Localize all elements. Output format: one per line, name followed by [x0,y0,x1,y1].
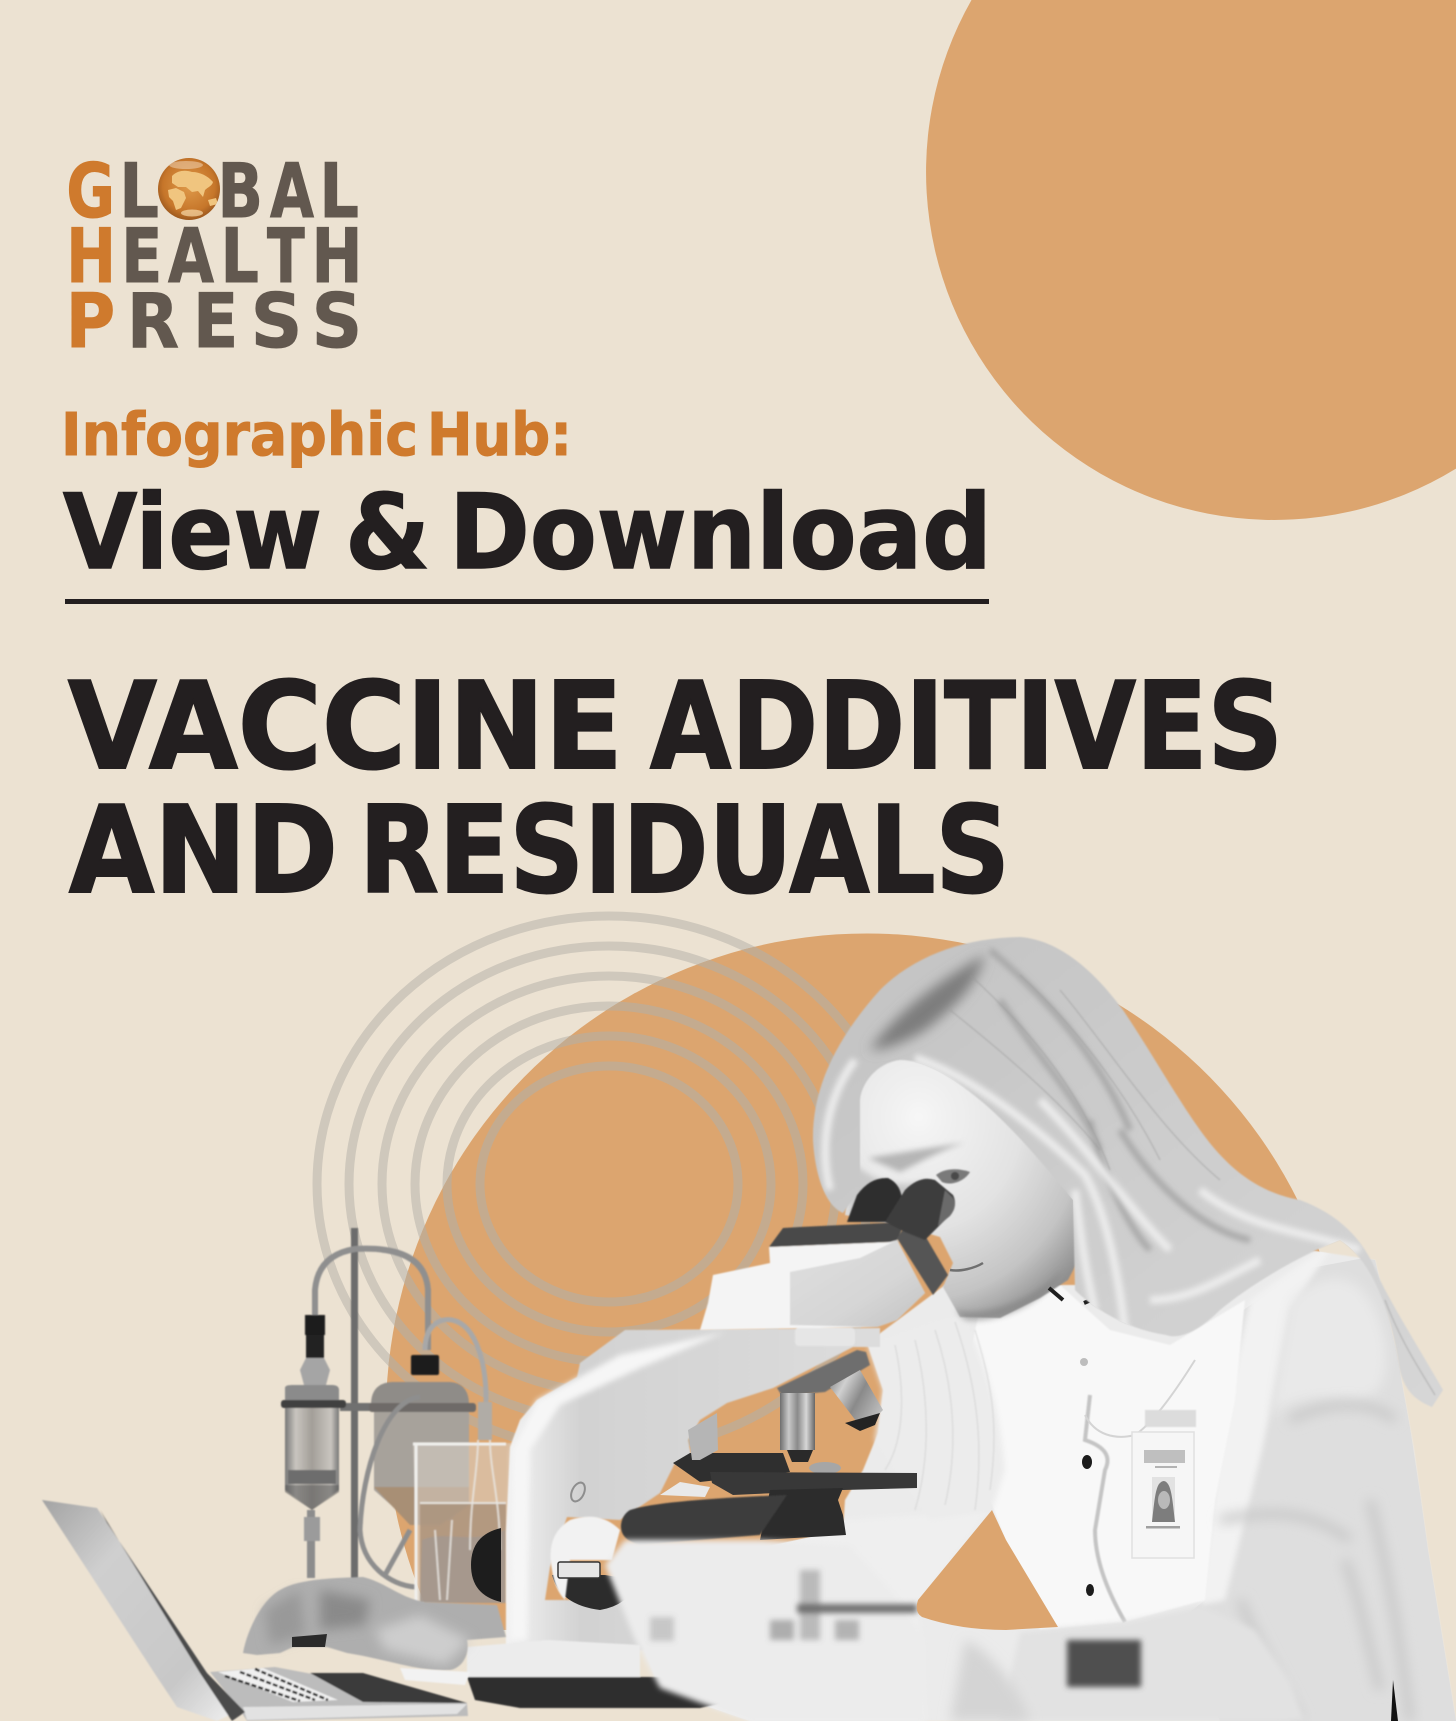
lab glassware apparatus [281,1228,511,1603]
heading: View & Download: View [63,473,322,593]
coat fold shadows [1220,1405,1410,1721]
logo letters: GHP orange initials: H [66,212,116,300]
nosepiece [777,1350,870,1396]
laptop keyboard [218,1668,338,1702]
title line 2: RESIDUALS [359,782,1010,921]
lower orange circle [386,933,1348,1630]
face [845,1050,1090,1318]
forearm sleeve [1015,1613,1302,1720]
laptop lid edge [100,1510,245,1721]
title line 2: AND [69,782,338,921]
hair [813,937,1443,1407]
coat vent [1391,1680,1398,1721]
tube connector [478,1402,492,1440]
subheading: Infographic Hub: Hub: [427,400,572,469]
eyepieces [847,1178,955,1240]
logo letters: wordmark grey: E [193,277,238,365]
gloved typing hand [243,1577,506,1685]
logo letters: GHP orange initials [66,147,116,365]
microscope base [467,1640,745,1708]
front sleeve [782,1518,844,1544]
shadow under palm [292,1634,327,1647]
lanyard [1085,1360,1195,1437]
sample holder [809,1462,841,1474]
logo letters: GHP orange initials: G [66,147,115,235]
laptop front edge [243,1704,467,1720]
heading: View & Download: & [345,473,430,593]
stage upper holder [673,1453,790,1482]
tripod strut [385,1530,410,1575]
ID badge [1132,1410,1196,1558]
coat lapel [1202,1251,1328,1604]
heading: View & Download: Download [449,473,992,593]
face detail: eye and shadows [850,1143,1062,1321]
glove white cuff [400,1668,470,1685]
logo letters: wordmark grey: E [121,212,162,300]
blurred watch block [1067,1640,1141,1687]
focus carrier dark [621,1495,787,1545]
stage [710,1472,917,1495]
hair strands light [825,1058,1360,1330]
logo letters: wordmark grey [119,147,363,365]
condenser [760,1488,846,1540]
logo letters: wordmark grey: T [267,212,305,300]
focus knob [550,1517,637,1610]
heading rule [65,599,989,604]
left vessel [281,1315,346,1578]
blurred gloved hand at stage [605,1540,925,1721]
coat right side shading [1206,1259,1456,1721]
objective lens vertical [780,1393,815,1462]
logo letters: wordmark grey: S [251,277,302,365]
logo letters: wordmark grey: L [319,147,359,235]
beaker [413,1440,511,1603]
white collar [660,1482,710,1497]
chest buttons [1080,1358,1094,1596]
logo letters: wordmark grey: H [312,212,362,300]
long front hair strands [868,1318,1005,1520]
laptop [42,1500,468,1721]
dark rear wheel [471,1528,501,1602]
arm support [688,1413,718,1460]
coat sleeve highlight [1278,1283,1382,1402]
arm highlight [510,1332,725,1640]
shirt placket shadow [1085,1395,1125,1622]
orange gap between arm and coat [917,1510,1058,1630]
logo letters: wordmark grey: S [312,277,362,365]
lab coat body [640,1250,1456,1721]
support rod [351,1228,358,1580]
shirt [960,1285,1245,1630]
glass tube arch [315,1249,428,1350]
right tube arch [425,1320,486,1402]
title line 1: ADDITIVES [650,658,1283,797]
logo letters: wordmark grey: L [119,147,159,235]
title [68,658,1283,921]
woman scientist [640,937,1456,1721]
logo letters: wordmark grey: B [218,147,263,235]
hair parting shadow [870,955,985,1050]
laptop trackpad area [310,1673,467,1703]
subheading: Infographic Hub: Infographic [61,400,418,469]
right vessel [369,1355,476,1525]
looping tube [360,1397,420,1587]
hair strands dark [990,950,1250,1250]
logo letters: wordmark grey: A [168,212,214,300]
concentric rings behind [317,916,901,1452]
microscope arm [506,1328,880,1650]
hand shading [265,1590,470,1665]
logo: Global Health Press [68,158,358,348]
microscope head [700,1215,948,1346]
logo letters: wordmark grey: R [127,277,179,365]
logo letters: wordmark grey: L [221,212,259,300]
microscope logo mark [568,1480,588,1504]
blurred objects [650,1570,917,1641]
microscope [467,1178,955,1708]
collar dark lines [1049,1288,1107,1303]
objective lens angled [830,1370,883,1431]
sleeve bottom shade [950,1642,1024,1721]
laptop lid [42,1500,240,1721]
laptop base [210,1667,468,1721]
title line 1: VACCINE [68,658,623,797]
clamp [340,1403,376,1411]
rings over orange circle [388,947,899,1446]
fine hair strands [950,975,1435,1395]
logo letters: wordmark grey: A [270,147,314,235]
icon: globe [158,158,220,220]
top right orange circle [926,0,1456,520]
logo letters: GHP orange initials: P [66,277,115,365]
